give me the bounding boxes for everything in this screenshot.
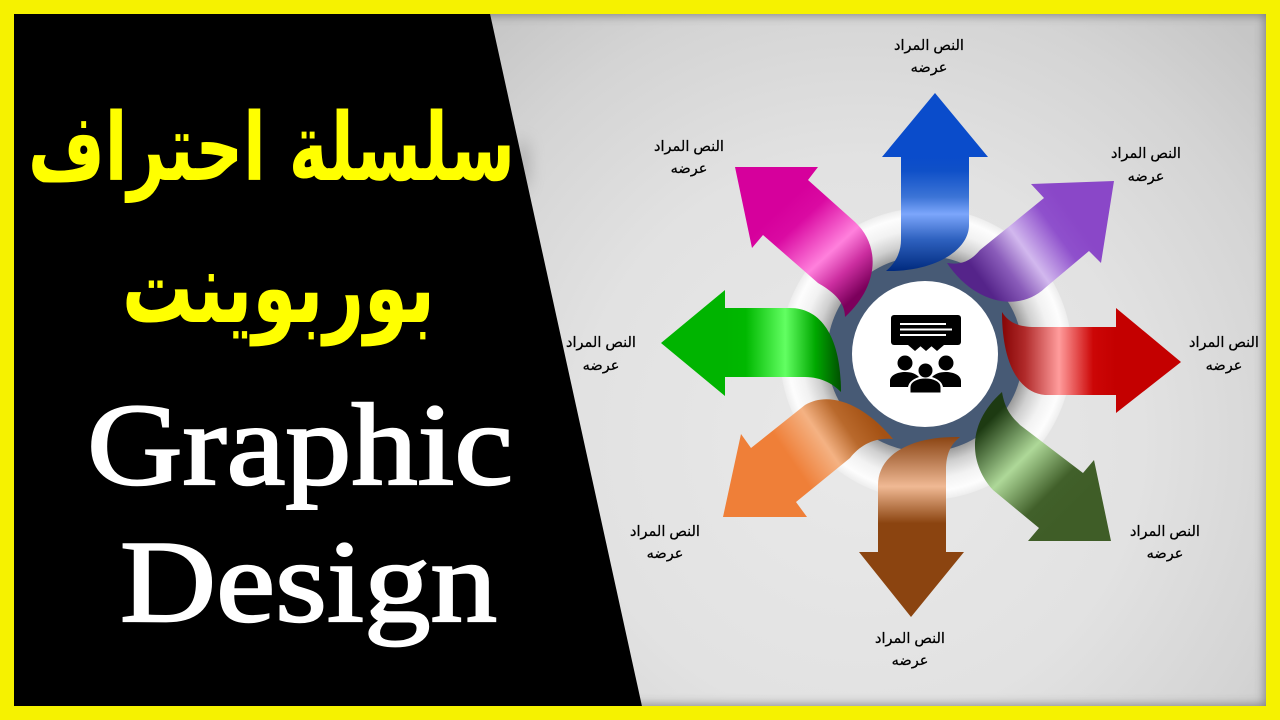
label: bottom right: النص المراد xyxy=(1130,524,1200,540)
label: right: النص المراد xyxy=(1189,335,1259,351)
panel: black title area xyxy=(0,0,645,720)
diagram ring xyxy=(780,208,1072,500)
label: top right: عرضه xyxy=(1128,169,1164,185)
label: top left: النص المراد xyxy=(654,139,724,155)
arrow: magenta up-left xyxy=(735,167,873,317)
shadow spot by the heading xyxy=(516,139,528,191)
heading: Arabic series title line 2: بوربوينت xyxy=(122,229,435,347)
arrow: green left xyxy=(661,290,841,396)
arrow: dark green down-right xyxy=(975,392,1111,541)
heading: Design: Design xyxy=(120,518,497,647)
label: top: عرضه xyxy=(911,60,947,76)
inner dark ring xyxy=(827,256,1023,452)
arrow: purple up-right xyxy=(947,181,1114,302)
label: bottom left: النص المراد xyxy=(630,524,700,540)
heading: Arabic series title line 1: سلسلة احتراف xyxy=(28,94,515,203)
label: top right: النص المراد xyxy=(1111,146,1181,162)
arrow: orange down-left xyxy=(723,399,893,517)
label: bottom: النص المراد xyxy=(875,631,945,647)
label: bottom left: عرضه xyxy=(647,546,683,562)
label: bottom: عرضه xyxy=(892,653,928,669)
center white circle xyxy=(852,281,998,427)
label: right: عرضه xyxy=(1206,358,1242,374)
label: top left: عرضه xyxy=(671,161,707,177)
label: top: النص المراد xyxy=(894,38,964,54)
label: left: النص المراد xyxy=(566,335,636,351)
heading: Graphic: Graphic xyxy=(87,381,513,510)
label: left: عرضه xyxy=(583,358,619,374)
label: bottom right: عرضه xyxy=(1147,546,1183,562)
arrow: red right xyxy=(1002,308,1181,413)
arrow: blue up xyxy=(882,93,988,271)
icon: audience with speech bubble xyxy=(890,315,961,393)
arrow: brown down xyxy=(859,437,964,617)
